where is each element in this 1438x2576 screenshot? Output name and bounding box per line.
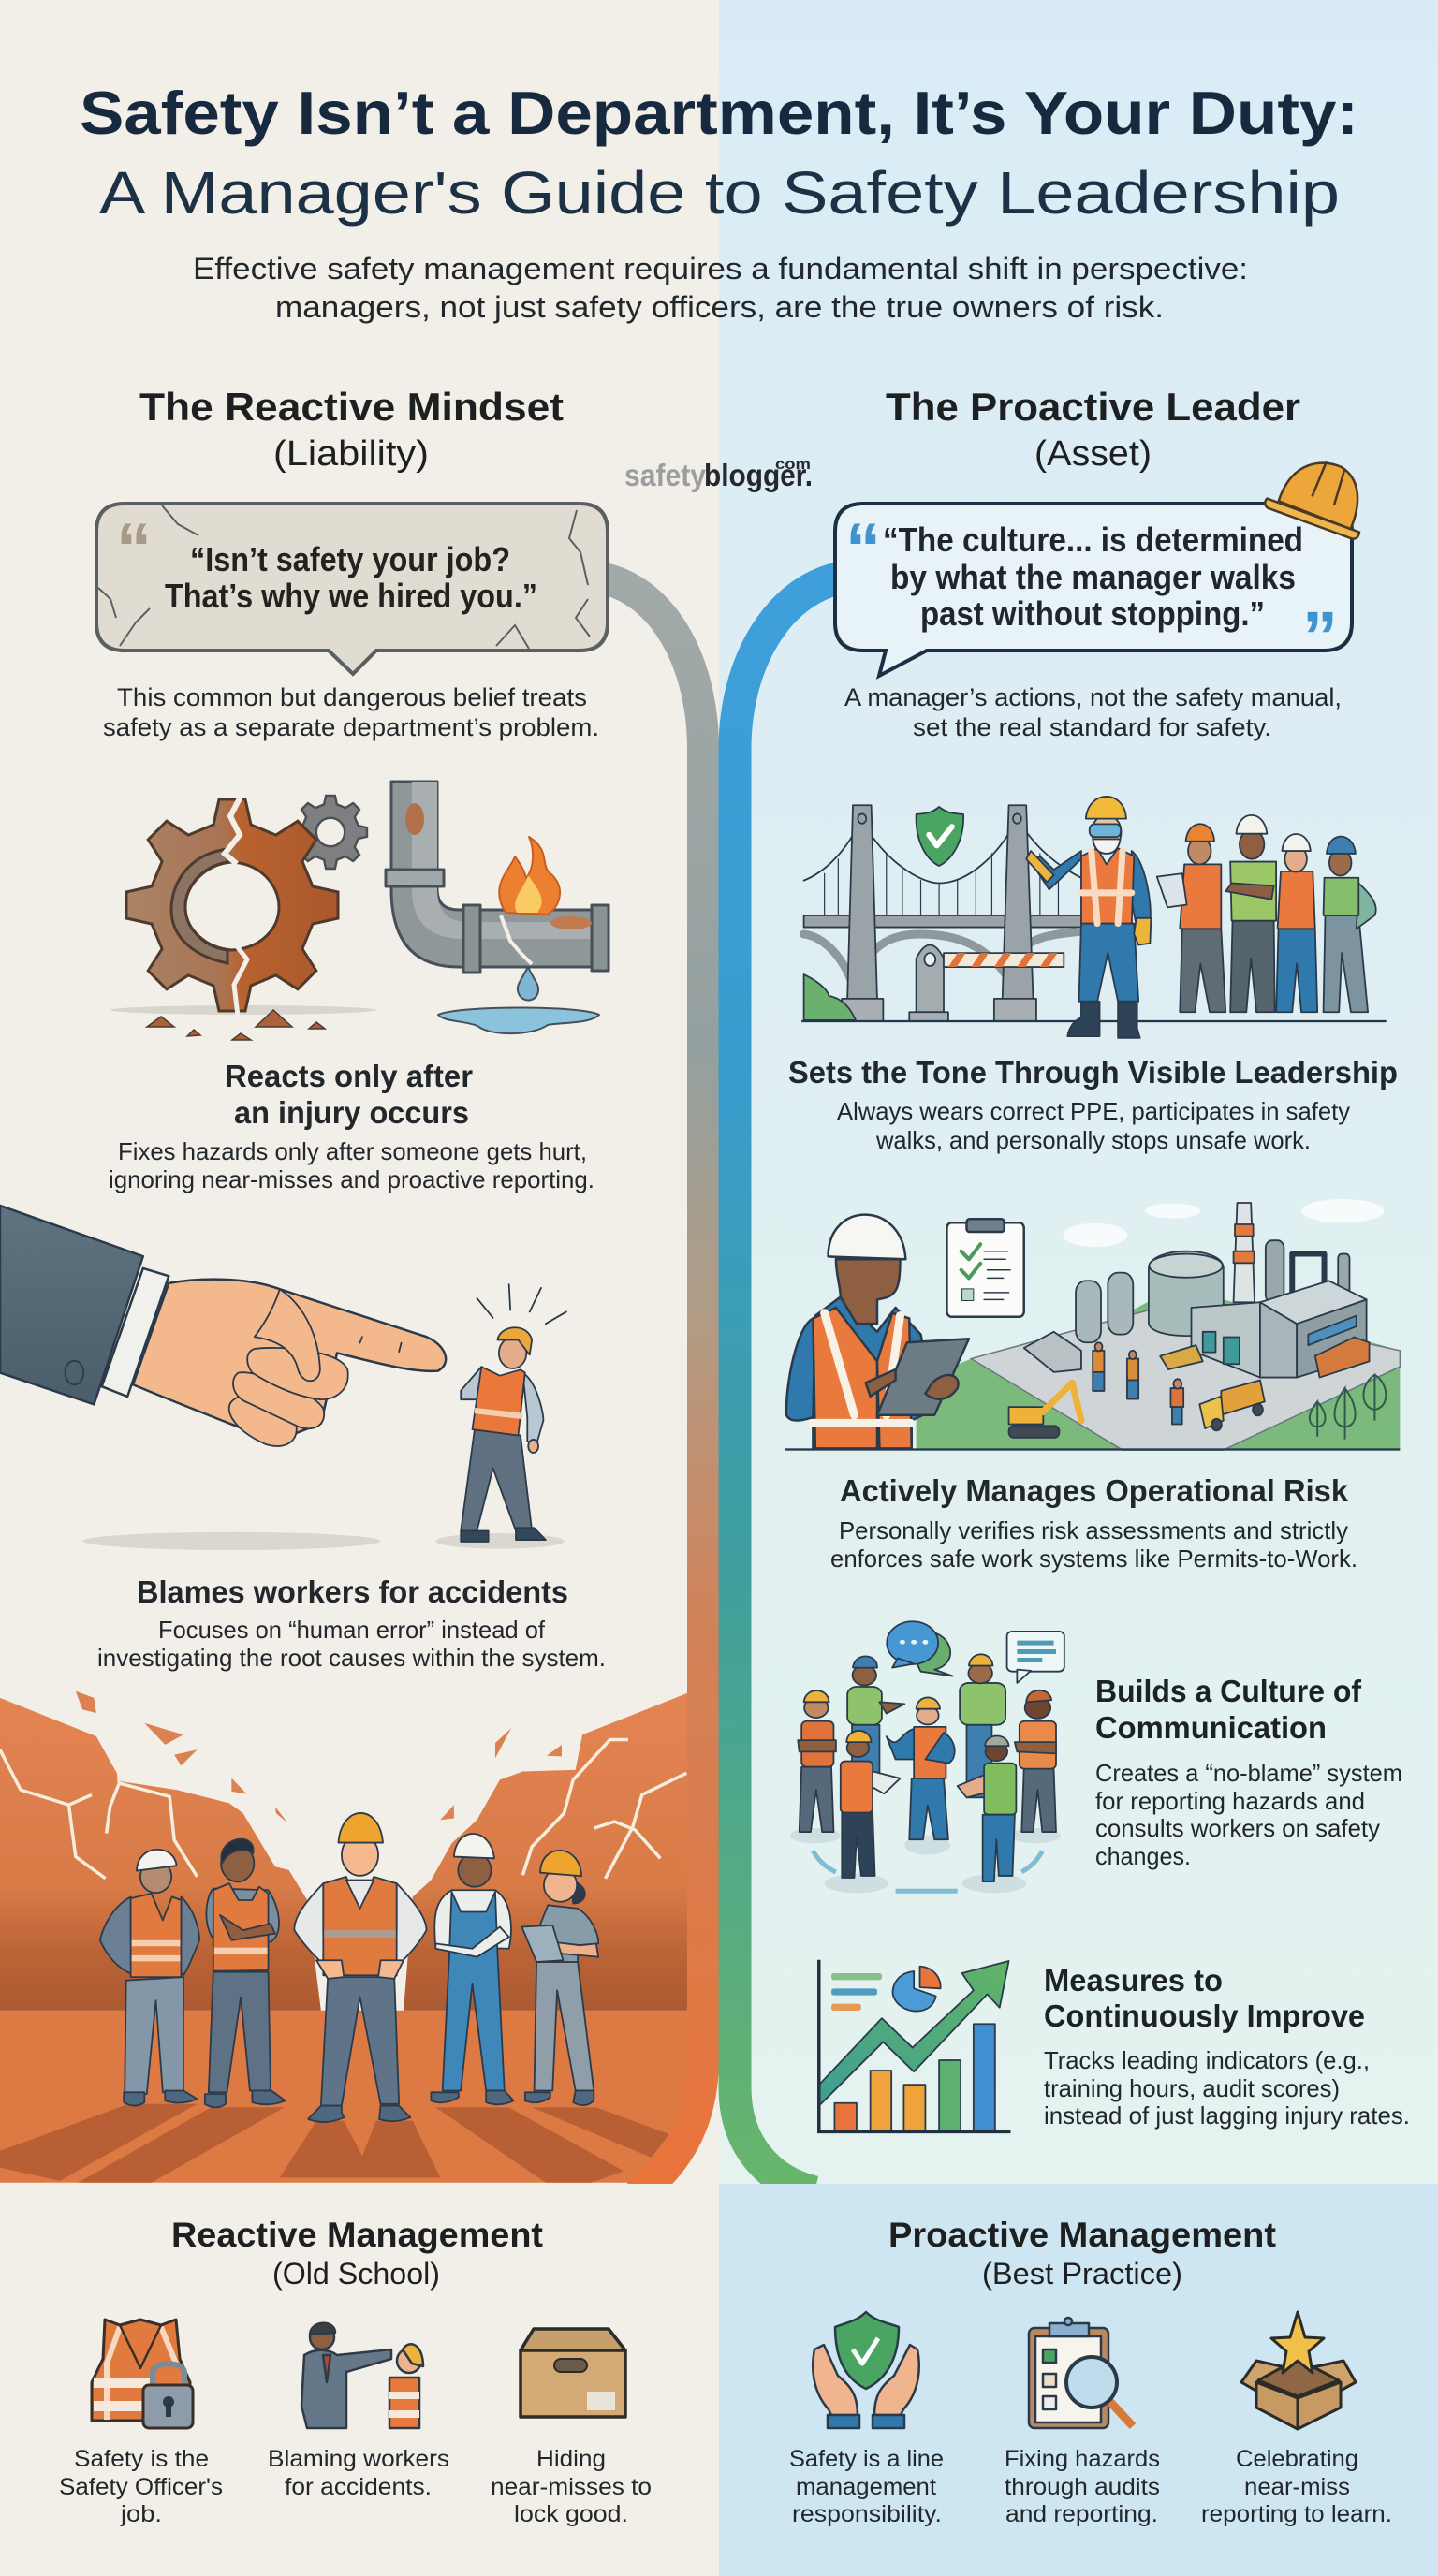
person far right (1015, 1690, 1056, 1832)
blamed worker (461, 1327, 546, 1542)
footer heading: reactive: (Old School) (272, 2257, 440, 2291)
text: culture of communication (1095, 1674, 1402, 1870)
close quote mark: ” (1302, 597, 1338, 677)
worker 1 (100, 1850, 199, 2106)
quote text (883, 520, 1303, 633)
footer heading: proactive: (Best Practice) (982, 2257, 1182, 2291)
connector band: reactive grey to orange (599, 578, 703, 2195)
site ground (917, 1286, 1400, 1450)
icon: clipboard with magnifier (1029, 2318, 1133, 2428)
clouds (1063, 1199, 1384, 1247)
text: measures to continuously improve: instead of just lagging injury rates. (1044, 2101, 1410, 2130)
right column heading: (Asset) (1034, 434, 1152, 474)
speech bubbles (887, 1621, 1064, 1683)
footer right panel (719, 2184, 1438, 2576)
text: measures to continuously improve: Tracks leading indicators (e.g., (1044, 2046, 1370, 2074)
worker 3 center (294, 1813, 427, 2122)
worker 4 (431, 1834, 514, 2104)
captions: reactive management: job. (120, 2501, 162, 2527)
text: sets the tone: Sets the Tone Through Visible Leadership (788, 1055, 1398, 1090)
background: left reactive side (0, 0, 719, 2576)
illustration: leaking pipe with flame (386, 782, 609, 1033)
floor circle (790, 1828, 1061, 1893)
text: reacts only after an injury (109, 1059, 594, 1193)
footer heading: reactive: Reactive Management (171, 2216, 543, 2254)
excavator (1009, 1383, 1081, 1438)
text: culture of communication: Builds a Culture of (1095, 1674, 1362, 1708)
footer heading: proactive: Proactive Management (888, 2216, 1276, 2254)
hand palm and index finger (133, 1280, 446, 1442)
captions: proactive management (789, 2446, 1392, 2527)
illustration: manager auditing industrial site (785, 1199, 1400, 1451)
text: measures to continuously improve (1044, 1963, 1410, 2130)
footer left panel (0, 2184, 719, 2576)
text: blames workers: Blames workers for accidents (137, 1574, 568, 1609)
quote text (165, 540, 537, 615)
icon: vest with padlock (92, 2320, 193, 2428)
captions: reactive management: Safety is the (74, 2446, 209, 2472)
safety leader figure (1026, 797, 1151, 1038)
person center (887, 1697, 955, 1839)
open quote mark: “ (845, 509, 881, 589)
intro text (193, 252, 1248, 324)
captions: proactive management: reporting to learn. (1201, 2501, 1392, 2527)
parked machine and truck (1024, 1332, 1203, 1372)
text: sets the tone: Always wears correct PPE, participates in safety (837, 1097, 1350, 1125)
fuel truck (1199, 1380, 1265, 1430)
watermark logo: safety (624, 458, 707, 492)
captions: reactive management: Hiding (536, 2446, 606, 2472)
person front right (958, 1736, 1016, 1881)
title: Safety Isn’t a Department, It’s Your Duty: (80, 79, 1358, 147)
text: culture of communication: Creates a “no-blame” system (1095, 1759, 1402, 1787)
text: culture of communication: changes. (1095, 1842, 1191, 1870)
watermark logo (624, 457, 813, 492)
connector band: proactive blue to green (735, 578, 843, 2192)
crew member 1 (1157, 824, 1225, 1012)
text: reactive belief: safety as a separate department’s problem. (103, 713, 599, 741)
text: measures to continuously improve: Continuously Improve (1044, 1998, 1365, 2033)
worker 2 (205, 1839, 286, 2107)
text: culture of communication: consults workers on safety (1095, 1814, 1380, 1842)
captions: reactive management: Safety Officer's (59, 2474, 223, 2500)
storage tanks (1076, 1251, 1224, 1342)
text: proactive belief: set the real standard for safety. (913, 713, 1271, 741)
captions: reactive management: Blaming workers (268, 2446, 449, 2472)
text: reactive belief (103, 683, 599, 741)
axes (819, 1960, 1011, 2131)
captions: proactive management: Fixing hazards (1005, 2446, 1160, 2472)
person back left (847, 1656, 904, 1775)
factory (1191, 1281, 1367, 1378)
text: reactive belief: This common but dangerous belief treats (117, 683, 587, 711)
quote bubble: proactive (835, 504, 1352, 677)
text: proactive belief (844, 683, 1342, 741)
icon: manager blaming worker (301, 2323, 423, 2428)
captions: proactive management: through audits (1005, 2474, 1160, 2500)
text: actively manages risk: enforces safe work systems like Permits-to-Work. (830, 1544, 1357, 1573)
worker 5 with clipboard (521, 1851, 598, 2105)
crew member 4 (1324, 837, 1376, 1012)
right column heading: The Proactive Leader (886, 385, 1300, 429)
text: proactive belief: A manager’s actions, not the safety manual, (844, 683, 1342, 711)
captions: proactive management: near-miss (1244, 2474, 1350, 2500)
footer heading: reactive (171, 2216, 543, 2291)
text: blames workers (97, 1574, 606, 1672)
captions: reactive management: for accidents. (285, 2474, 432, 2500)
right column heading (886, 385, 1300, 474)
trees (1310, 1375, 1386, 1440)
text: reacts only after an injury: Fixes hazards only after someone gets hurt, (118, 1137, 587, 1165)
left column heading: The Reactive Mindset (139, 385, 564, 429)
cracked wall left (0, 1698, 321, 2011)
icon: shield in caring hands (813, 2312, 919, 2428)
flame (499, 837, 560, 915)
shirt cuff (102, 1268, 169, 1397)
text: blames workers: investigating the root causes within the system. (97, 1644, 606, 1672)
intro text: Effective safety management requires a fundamental shift in perspective: (193, 252, 1248, 285)
captions: proactive management: management (796, 2474, 936, 2500)
captions: reactive management (59, 2446, 652, 2527)
watermark logo: com (775, 457, 811, 473)
illustration: pointing hand and blamed worker (0, 1206, 566, 1550)
title (80, 79, 1358, 227)
text: culture of communication: for reporting hazards and (1095, 1787, 1365, 1815)
crates (1315, 1338, 1370, 1378)
curled fingers (229, 1289, 402, 1446)
text: culture of communication: Communication (1095, 1710, 1327, 1745)
text: reacts only after an injury: Reacts only after (225, 1059, 473, 1093)
bubble cracks (98, 505, 590, 649)
captions: reactive management: near-misses to (491, 2474, 652, 2500)
illustration: workers communicating in a circle (790, 1621, 1064, 1893)
quote text: That’s why we hired you.” (165, 577, 537, 615)
bars (834, 2024, 995, 2131)
pie icon (893, 1967, 941, 2012)
gear debris (147, 1010, 325, 1040)
suit sleeve (0, 1206, 143, 1404)
crew member 2 (1225, 815, 1276, 1012)
text: reacts only after an injury: an injury occurs (234, 1095, 469, 1130)
rising arrow (820, 1961, 1009, 2105)
captions: proactive management: Celebrating (1236, 2446, 1358, 2472)
water drop (518, 967, 538, 1000)
text: blames workers: Focuses on “human error” instead of (158, 1616, 546, 1644)
icon: hard hat on bubble (1264, 446, 1378, 540)
illustration: leader at bridge with crew (801, 797, 1387, 1038)
text: measures to continuously improve: training hours, audit scores) (1044, 2074, 1340, 2102)
text: reacts only after an injury: ignoring near-misses and proactive reporting. (109, 1165, 594, 1193)
chart: measures rising (819, 1960, 1011, 2131)
manager figure (786, 1215, 969, 1448)
small grey gear (294, 796, 367, 869)
left column heading (139, 385, 564, 474)
cracked wall right (404, 1693, 688, 2011)
tiny site workers (1093, 1342, 1183, 1425)
cracks (0, 1740, 686, 1879)
background: right proactive side (719, 0, 1438, 2184)
puddle (438, 1007, 599, 1033)
crew member 3 (1276, 834, 1317, 1012)
alarm rays (477, 1284, 566, 1324)
ground (0, 2011, 688, 2183)
ground line (785, 1448, 1400, 1451)
scene: workers in front of cracked orange wall (0, 1691, 688, 2183)
quote bubble: reactive (96, 504, 608, 674)
captions: reactive management: lock good. (514, 2501, 628, 2527)
text: sets the tone (788, 1055, 1398, 1154)
quote text: past without stopping.” (920, 594, 1265, 633)
bridge (804, 805, 1081, 1021)
icon: cardboard box (521, 2329, 625, 2417)
legend bars (831, 1973, 882, 2011)
text: actively manages risk (830, 1473, 1357, 1573)
person front left (841, 1731, 900, 1878)
quote text: “The culture... is determined (883, 520, 1303, 559)
clipboard (946, 1219, 1024, 1317)
captions: proactive management: and reporting. (1005, 2501, 1158, 2527)
footer heading: proactive (888, 2216, 1276, 2291)
flying debris (76, 1691, 562, 1823)
text: actively manages risk: Personally verifies risk assessments and strictly (839, 1516, 1348, 1544)
quote text: “Isn’t safety your job? (190, 540, 510, 578)
quote text: by what the manager walks (890, 558, 1296, 596)
main gear (126, 795, 338, 1016)
person back right (960, 1654, 1005, 1797)
text: sets the tone: walks, and personally stops unsafe work. (875, 1126, 1311, 1154)
text: measures to continuously improve: Measures to (1044, 1963, 1223, 1998)
ground line (801, 1020, 1387, 1022)
long shadows (0, 2104, 669, 2183)
illustration: broken rusty gear (110, 795, 376, 1040)
watermark logo: blogger. (704, 458, 813, 492)
open quote mark: “ (116, 509, 152, 589)
intro text: managers, not just safety officers, are the true owners of risk. (275, 290, 1164, 324)
person far left (798, 1690, 836, 1832)
text: actively manages risk: Actively Manages Operational Risk (840, 1473, 1349, 1508)
title: A Manager's Guide to Safety Leadership (99, 159, 1340, 227)
chimney and stacks (1234, 1203, 1349, 1308)
left column heading: (Liability) (273, 434, 429, 474)
captions: proactive management: Safety is a line (789, 2446, 944, 2472)
captions: proactive management: responsibility. (792, 2501, 942, 2527)
icon: open box with star (1241, 2312, 1356, 2429)
